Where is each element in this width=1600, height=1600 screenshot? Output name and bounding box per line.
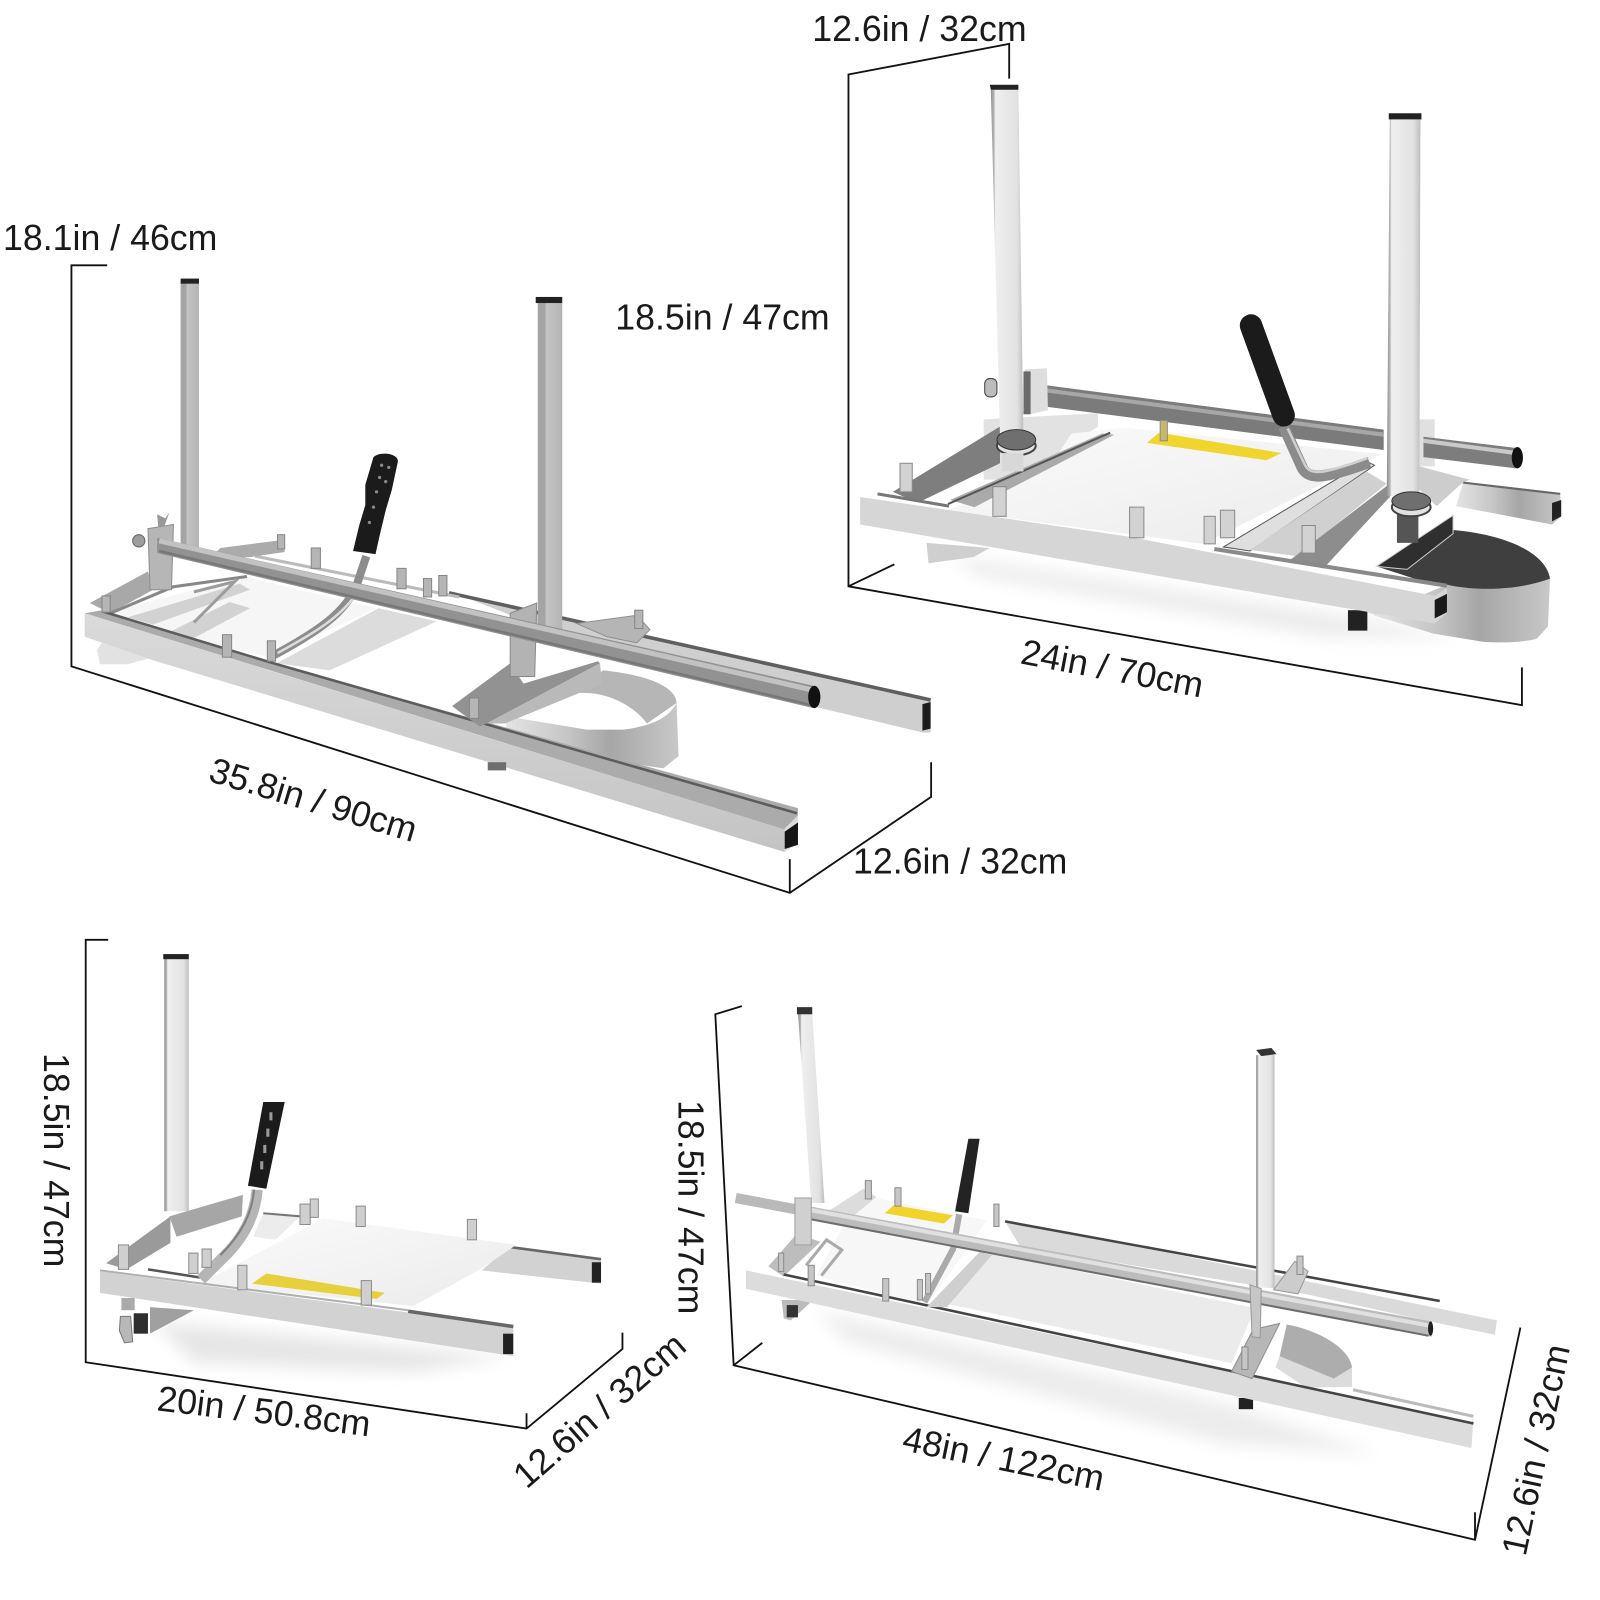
pipe end <box>1512 447 1523 468</box>
label: 18.1in: 18.1in / 46cm <box>3 218 217 258</box>
front rail strip <box>85 610 798 830</box>
front rail face <box>100 1271 513 1356</box>
machine: 36 inch mill, upper left <box>3 218 1067 893</box>
cross bracket <box>452 661 600 727</box>
machine: 48 inch mill, lower right <box>671 1006 1578 1559</box>
label: 12.6in: 12.6in / 32cm <box>506 1325 694 1496</box>
sheet reflections <box>128 584 250 641</box>
white gap frame <box>148 1269 200 1278</box>
front rail face <box>85 613 785 852</box>
cross dark bar <box>1290 484 1390 568</box>
handle steel <box>201 1190 257 1280</box>
back bracket <box>1273 1261 1308 1294</box>
back rail <box>1456 482 1561 524</box>
right clamp <box>1250 1285 1261 1338</box>
pipe left <box>736 1198 806 1211</box>
cross pale plate <box>1223 461 1374 551</box>
label: 12.6in: 12.6in / 32cm <box>1494 1341 1578 1559</box>
foot right <box>1348 610 1367 631</box>
machine: 24 inch mill, upper right <box>615 9 1561 705</box>
frame bar lower <box>106 1216 170 1269</box>
right lower post <box>1397 510 1418 543</box>
handle grip <box>353 454 398 554</box>
inner frame <box>110 577 247 613</box>
left clamp <box>148 524 173 590</box>
left post <box>991 90 1023 437</box>
label: 18.5in: 18.5in / 47cm <box>36 1053 76 1267</box>
back rail <box>459 595 931 733</box>
pipe end <box>1428 1321 1433 1336</box>
pipe end <box>808 686 820 708</box>
front rail strip <box>1214 549 1447 586</box>
back rail strip near sheet <box>255 556 459 597</box>
handle grip <box>248 1102 285 1189</box>
foot clamp <box>150 1307 194 1334</box>
left corner arm <box>90 571 153 613</box>
studs <box>102 535 643 718</box>
mid cross bar <box>927 1252 992 1307</box>
studs <box>118 1199 477 1305</box>
right clamp <box>1419 419 1435 466</box>
left arm <box>768 1234 820 1277</box>
right post <box>1387 119 1420 496</box>
pipe left <box>1034 384 1384 450</box>
label: 20in: 20in / 50.8cm <box>155 1378 373 1444</box>
back strip <box>984 413 1098 480</box>
grip dots <box>368 464 390 524</box>
back triangle bracket <box>577 615 650 643</box>
machine: 20 inch mill, lower left <box>36 940 694 1496</box>
feet <box>782 1300 813 1320</box>
handle steel <box>924 1214 959 1302</box>
knob <box>985 379 997 397</box>
rail end <box>922 702 931 731</box>
back frame strip <box>253 1213 300 1240</box>
right clamp <box>510 603 537 677</box>
left clamp <box>1024 368 1048 414</box>
left clamp <box>795 1198 811 1245</box>
foot <box>927 543 990 563</box>
rail end <box>1435 594 1447 618</box>
left post cap <box>181 279 199 284</box>
soft shadow <box>153 1321 510 1372</box>
handle steel <box>1284 427 1369 476</box>
foot <box>97 643 150 664</box>
right post <box>538 303 562 632</box>
dimension lines <box>86 940 622 1429</box>
left arm <box>893 427 1000 500</box>
label: 24in: 24in / 70cm <box>1018 632 1207 705</box>
handle grip <box>1251 326 1284 415</box>
wing nut <box>157 512 169 527</box>
front rail face <box>746 1270 1473 1448</box>
dimension lines <box>715 1006 1520 1540</box>
sheet <box>200 1218 516 1306</box>
yellow label <box>885 1205 953 1223</box>
right bracket arm <box>1232 1323 1280 1379</box>
studs <box>779 1181 1303 1369</box>
left post <box>181 283 199 549</box>
studs <box>900 420 1315 553</box>
transparent sheet <box>103 577 377 657</box>
left post <box>798 1013 824 1203</box>
yellow label <box>1147 433 1282 460</box>
dimension lines <box>848 44 1522 705</box>
under foot <box>488 762 506 770</box>
sheet <box>948 428 1382 544</box>
label: 18.5in: 18.5in / 47cm <box>671 1100 711 1314</box>
guard band <box>1373 579 1550 642</box>
knob <box>133 535 145 547</box>
grip dots <box>260 1112 272 1169</box>
left inner details <box>806 1240 842 1276</box>
label: 48in: 48in / 122cm <box>899 1419 1108 1499</box>
dimension lines <box>71 265 931 893</box>
rail strip <box>408 1311 513 1327</box>
soft shadow <box>816 1311 1378 1454</box>
semicircular guard front <box>506 703 679 768</box>
rail end <box>785 822 798 849</box>
yellow label <box>252 1273 385 1299</box>
post <box>164 958 189 1211</box>
front rail face <box>860 497 1447 623</box>
right arm <box>1419 466 1469 506</box>
pipe <box>157 538 813 708</box>
right post cap <box>536 297 562 303</box>
right post <box>1256 1055 1274 1288</box>
back frame <box>830 1189 877 1220</box>
left collar <box>997 430 1036 455</box>
dark bracket <box>1377 515 1453 569</box>
guard lower <box>1276 1356 1352 1388</box>
right collar <box>1392 492 1431 516</box>
handle grip <box>955 1139 980 1213</box>
back rail <box>482 1247 601 1284</box>
left lower post <box>1002 453 1023 471</box>
guard <box>1280 1324 1352 1379</box>
soft shadow <box>949 556 1459 638</box>
back left bracket <box>209 540 285 559</box>
frame bar upper <box>169 1195 243 1237</box>
pipe <box>803 1205 1432 1337</box>
label: 12.6in: 12.6in / 32cm <box>853 841 1067 881</box>
guard interior <box>1377 530 1550 589</box>
semicircular guard back <box>571 670 677 723</box>
label: 18.5in: 18.5in / 47cm <box>615 298 830 338</box>
label: 12.6in: 12.6in / 32cm <box>812 9 1027 49</box>
central plane <box>938 1253 1255 1363</box>
handle steel <box>270 556 366 657</box>
mid cross plate <box>277 608 437 670</box>
inner bar <box>950 434 1114 507</box>
label: 35.8in: 35.8in / 90cm <box>205 750 422 850</box>
pipe right <box>1423 437 1516 468</box>
transparent sheet <box>816 1198 987 1306</box>
back rail <box>1005 1221 1497 1335</box>
